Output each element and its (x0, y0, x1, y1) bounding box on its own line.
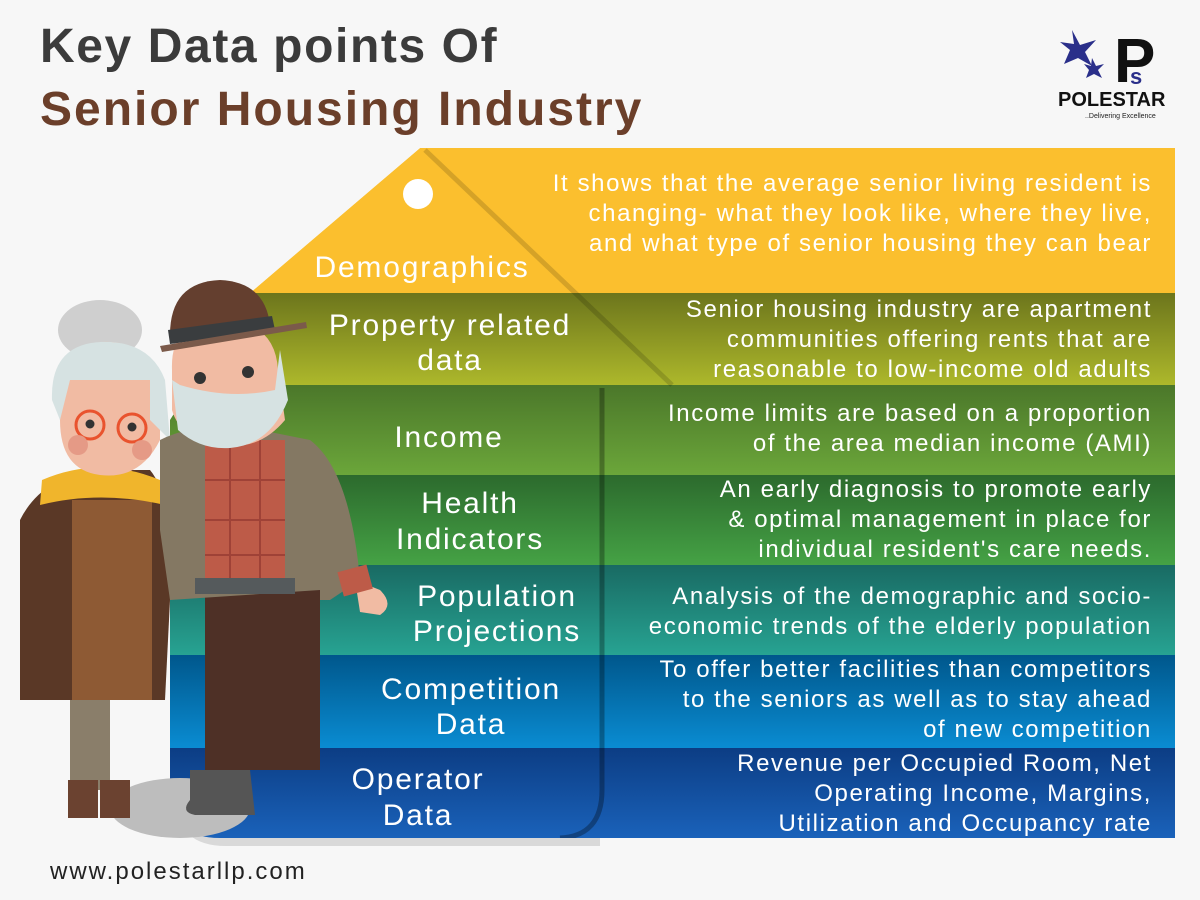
band: demographics (253, 148, 1175, 293)
labels (314, 251, 581, 832)
desc: demographics: and what type of senior housing they can bear (589, 230, 1152, 257)
desc: income: Income limits are based on a proportion (668, 400, 1152, 427)
logo: polestar: s (1130, 64, 1142, 89)
desc: population: economic trends of the elderly population (649, 613, 1152, 640)
label: population: Projections (413, 615, 581, 648)
desc: competition: of new competition (923, 716, 1152, 743)
desc: demographics: changing- what they look like, where they live, (589, 200, 1152, 227)
label: property: data (417, 344, 483, 377)
descriptions (553, 170, 1152, 837)
man (205, 580, 320, 770)
label: competition: Data (436, 708, 506, 741)
illustration: elderly couple (20, 280, 388, 838)
band: operator (170, 748, 1175, 838)
label: property: Property related (329, 309, 571, 342)
title (40, 20, 643, 136)
band: income (170, 385, 1175, 475)
label: health: Health (421, 487, 519, 520)
roof edge shadow (425, 150, 672, 385)
desc: property: Senior housing industry are apartment (686, 296, 1152, 323)
band: competition (170, 655, 1175, 748)
desc: health: & optimal management in place for (728, 506, 1152, 533)
roof left cover (0, 148, 420, 293)
logo: polestar: P (1114, 27, 1155, 96)
desc: demographics: It shows that the average senior living resident is (553, 170, 1152, 197)
icon: roof window circle (403, 179, 433, 209)
label: income: Income (394, 421, 504, 454)
desc: operator: Operating Income, Margins, (814, 780, 1152, 807)
desc: property: reasonable to low-income old adults (713, 356, 1152, 383)
desc: population: Analysis of the demographic and socio- (672, 583, 1152, 610)
footer url: www.polestarllp.com (49, 858, 307, 885)
label: operator: Operator (352, 763, 484, 796)
logo: polestar: POLESTAR (1058, 89, 1166, 111)
house shadow (176, 430, 600, 846)
desc: competition: to the seniors as well as to stay ahead (683, 686, 1152, 713)
desc: operator: Utilization and Occupancy rate (778, 810, 1152, 837)
label: health: Indicators (396, 523, 544, 556)
desc: operator: Revenue per Occupied Room, Net (737, 750, 1152, 777)
desc: health: An early diagnosis to promote early (720, 476, 1152, 503)
desc: property: communities offering rents that are (727, 326, 1152, 353)
desc: competition: To offer better facilities than competitors (659, 656, 1152, 683)
logo: polestar: ..Delivering Excellence (1085, 113, 1156, 120)
band: property (256, 293, 1175, 385)
label: demographics: Demographics (314, 251, 530, 284)
woman (70, 690, 110, 790)
house bands (170, 148, 1175, 838)
desc: health: individual resident's care needs. (758, 536, 1152, 563)
label: operator: Data (383, 799, 453, 832)
desc: income: of the area median income (AMI) (753, 430, 1152, 457)
label: population: Population (417, 580, 577, 613)
logo: polestar (1058, 27, 1166, 120)
label: competition: Competition (381, 673, 561, 706)
band: population (170, 565, 1175, 655)
wall edge shadow (560, 388, 602, 838)
band: health (336, 475, 1175, 565)
title: Senior Housing Industry (40, 83, 643, 136)
title: Key Data points Of (40, 20, 498, 73)
